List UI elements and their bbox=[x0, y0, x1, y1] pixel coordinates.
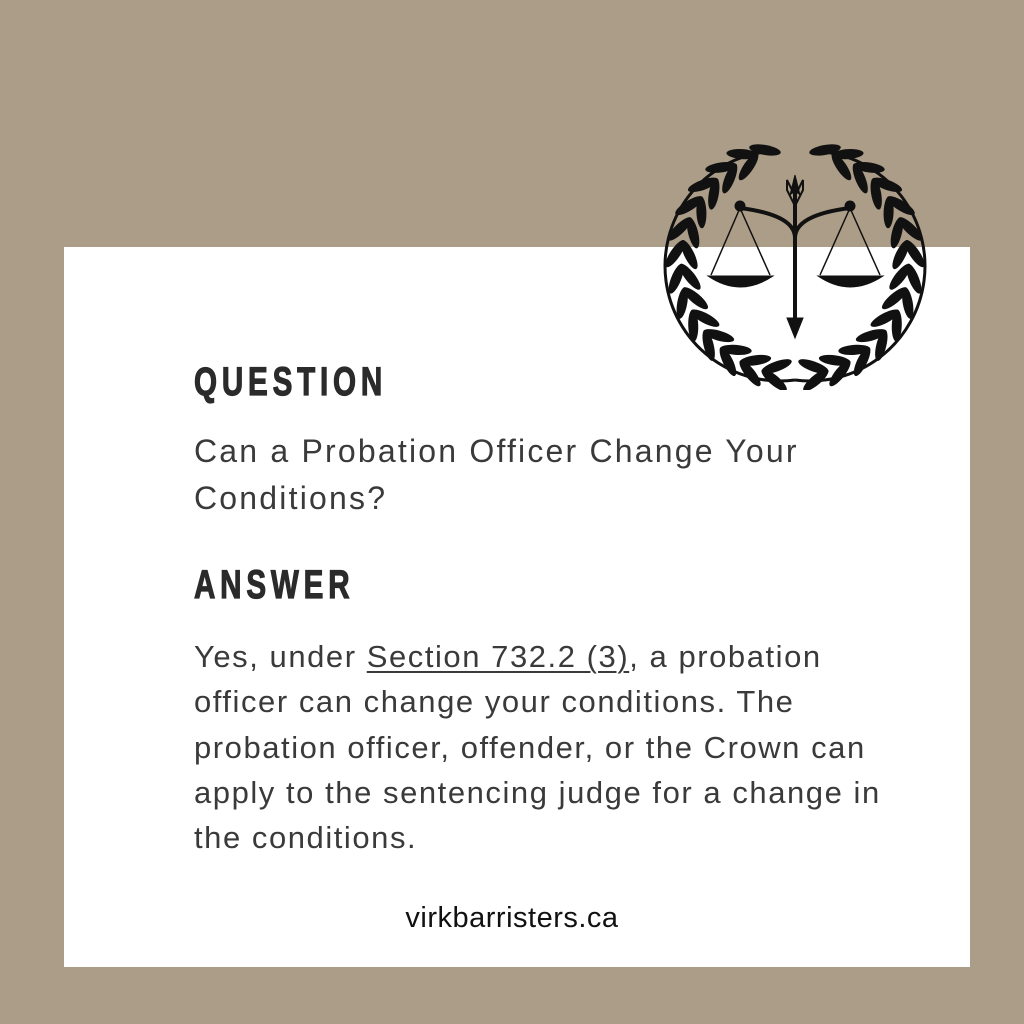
scales bbox=[708, 175, 883, 338]
answer text: Yes, under Section 732.2 (3), a probation officer can change your conditions. The probation officer, offender, or the Crown can apply to the sentencing judge for a change in the conditions. bbox=[194, 639, 881, 855]
question text: Can a Probation Officer Change Your Conditions? bbox=[194, 433, 799, 516]
footer website: virkbarristers.ca bbox=[405, 902, 619, 934]
wreath stems bbox=[665, 152, 795, 381]
white card bbox=[64, 247, 970, 967]
logo: scales of justice in laurel wreath bbox=[664, 144, 926, 390]
heading: question: QUESTION bbox=[194, 360, 387, 404]
heading: answer: ANSWER bbox=[194, 563, 354, 607]
